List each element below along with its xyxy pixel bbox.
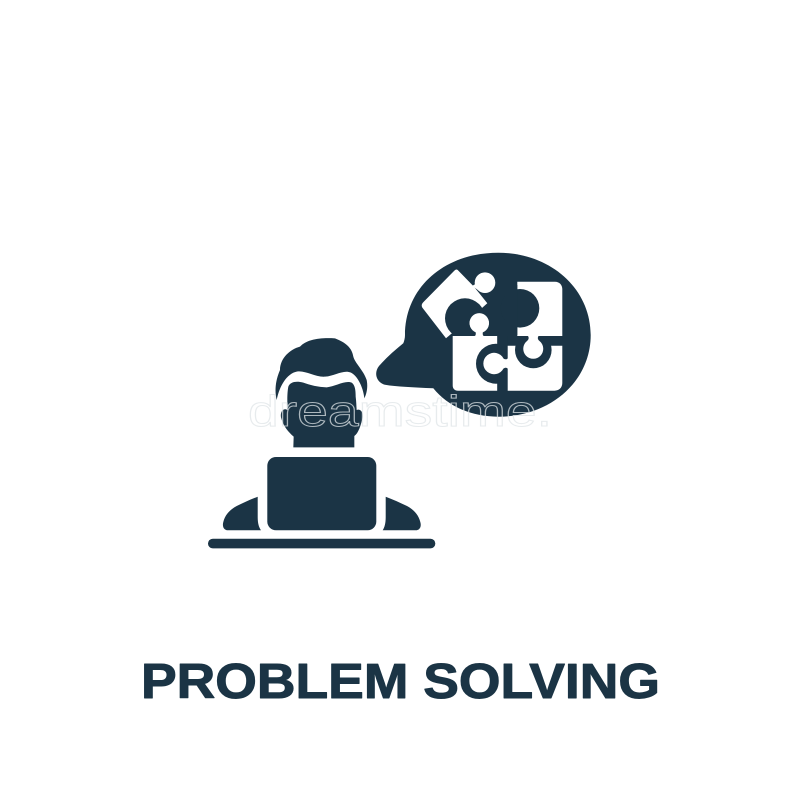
right shoulder — [383, 497, 421, 530]
watermark: dreamstime. — [248, 387, 552, 436]
head — [276, 338, 367, 447]
piece: top right — [501, 282, 562, 359]
table — [208, 539, 435, 548]
piece: bottom left — [453, 313, 516, 392]
laptop — [267, 457, 376, 530]
piece: bottom right — [483, 332, 562, 391]
title: PROBLEM SOLVING — [141, 655, 660, 709]
icon: speech bubble with puzzle — [376, 253, 591, 417]
piece: top left — [422, 269, 495, 338]
bubble — [376, 253, 591, 417]
left shoulder — [223, 497, 261, 530]
icon: person at laptop — [208, 338, 435, 548]
knob: bottom left piece — [470, 314, 489, 333]
face — [281, 382, 363, 447]
hair — [276, 338, 367, 400]
